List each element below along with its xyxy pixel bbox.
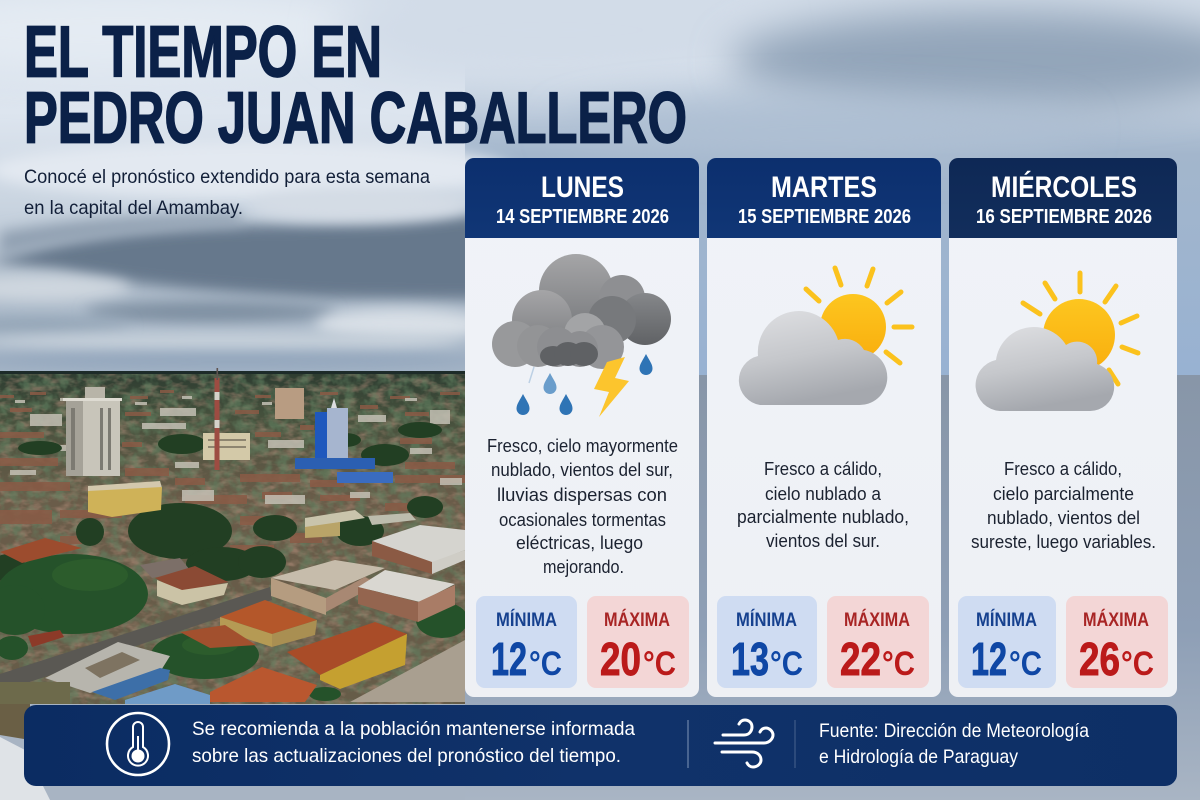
maximum temperature: lunes	[587, 596, 689, 688]
minimum temperature: martes	[717, 596, 817, 688]
white commercial building	[372, 525, 465, 574]
minimum temperature: lunes	[476, 596, 577, 688]
maximum temperature: martes: 22	[840, 633, 881, 685]
maximum temperature: martes: MÁXIMA	[844, 609, 910, 631]
footer banner	[24, 705, 1177, 786]
header: miércoles: MIÉRCOLES	[991, 170, 1137, 204]
icon: sun behind cloud	[739, 268, 912, 405]
tower: beige apartment	[275, 388, 304, 419]
beige warehouses	[271, 560, 455, 622]
minimum temperature: miércoles: MÍNIMA	[976, 609, 1037, 631]
description: lunes: Fresco, cielo mayormente	[487, 436, 678, 456]
orange house	[180, 600, 317, 648]
description: lunes: eléctricas, luego	[516, 533, 643, 553]
small buildings right	[305, 510, 416, 538]
description: lunes: lluvias dispersas con	[497, 485, 667, 505]
mid-left house	[140, 558, 228, 605]
source text: Fuente: Dirección de Meteorología	[819, 720, 1089, 742]
header: martes: 15 SEPTIEMBRE 2026	[738, 206, 911, 228]
minimum temperature: miércoles: °C	[1009, 645, 1042, 683]
panel: martes	[707, 158, 941, 697]
road	[0, 587, 272, 692]
right concrete rooftops	[350, 640, 465, 702]
description: lunes: nublado, vientos del sur,	[491, 460, 673, 480]
maximum temperature: martes	[827, 596, 929, 688]
panel: lunes	[465, 158, 699, 697]
header: martes: MARTES	[771, 171, 877, 204]
big left tree	[0, 554, 468, 701]
header: miércoles: 16 SEPTIEMBRE 2026	[976, 206, 1152, 228]
recommendation text: Se recomienda a la población mantenerse informada	[192, 718, 635, 740]
yellow and orange house	[287, 622, 407, 689]
minimum temperature: martes: 13	[731, 633, 769, 685]
minimum temperature: miércoles: 12	[971, 633, 1007, 685]
lower street edge	[0, 704, 465, 800]
bottom-left white roof	[0, 642, 210, 704]
title: PEDRO JUAN CABALLERO	[24, 78, 687, 158]
subtitle: en la capital del Amambay.	[24, 197, 243, 219]
description: miércoles: cielo parcialmente	[993, 484, 1134, 504]
distant red roofs	[0, 390, 465, 554]
icon: thermometer	[107, 713, 169, 775]
minimum temperature: martes: °C	[770, 645, 803, 683]
yellow building	[88, 481, 162, 517]
cream building	[203, 433, 250, 460]
minimum temperature: lunes: 12	[491, 633, 527, 685]
subtitle	[24, 166, 430, 219]
maximum temperature: lunes: °C	[643, 645, 676, 683]
header: lunes: 14 SEPTIEMBRE 2026	[496, 206, 669, 228]
maximum temperature: lunes: MÁXIMA	[604, 609, 670, 631]
description: lunes: ocasionales tormentas	[499, 510, 666, 530]
header: martes	[707, 158, 941, 238]
distant pale roofs	[10, 396, 462, 504]
description: miércoles: Fresco a cálido,	[1004, 459, 1122, 479]
description: martes: parcialmente nublado,	[737, 507, 909, 527]
description: miércoles	[971, 459, 1156, 552]
recommendation text: sobre las actualizaciones del pronóstico del tiempo.	[192, 745, 621, 767]
minimum temperature: lunes: °C	[529, 645, 562, 683]
maximum temperature: miércoles: MÁXIMA	[1083, 609, 1149, 631]
minimum temperature: lunes: MÍNIMA	[496, 609, 557, 631]
description: martes	[737, 459, 909, 551]
description: miércoles: nublado, vientos del	[987, 508, 1140, 528]
description: miércoles: sureste, luego variables.	[971, 532, 1156, 552]
maximum temperature: lunes: 20	[600, 633, 641, 685]
panel: miércoles	[949, 158, 1177, 697]
blue tower	[295, 398, 393, 483]
header: miércoles	[949, 158, 1177, 238]
description: lunes: mejorando.	[543, 557, 624, 577]
description: martes: vientos del sur.	[766, 531, 880, 551]
maximum temperature: miércoles: 26	[1079, 633, 1120, 685]
left red roofs	[0, 538, 82, 563]
background: aerial city photo	[0, 346, 468, 800]
icon: sun behind small cloud	[976, 273, 1138, 411]
source text: e Hidrología de Paraguay	[819, 746, 1018, 768]
title	[24, 12, 687, 158]
recommendation text	[192, 718, 635, 767]
minimum temperature: miércoles	[958, 596, 1056, 688]
tower: white high-rise	[63, 387, 122, 476]
title: EL TIEMPO EN	[24, 12, 382, 92]
minimum temperature: martes: MÍNIMA	[736, 609, 797, 631]
description: martes: Fresco a cálido,	[764, 459, 882, 479]
icon: storm cloud with rain and lightning	[492, 254, 671, 417]
maximum temperature: miércoles	[1066, 596, 1168, 688]
header: lunes	[465, 158, 699, 238]
dark tree masses	[0, 422, 443, 582]
icon: wind	[715, 720, 773, 767]
description: martes: cielo nublado a	[765, 484, 882, 504]
subtitle: Conocé el pronóstico extendido para esta semana	[24, 166, 430, 188]
communication mast	[214, 368, 220, 470]
description: lunes	[487, 436, 678, 577]
bottom orange roof	[210, 667, 317, 702]
maximum temperature: miércoles: °C	[1121, 645, 1154, 683]
header: lunes: LUNES	[541, 171, 624, 204]
maximum temperature: martes: °C	[882, 645, 915, 683]
source text	[819, 720, 1089, 768]
